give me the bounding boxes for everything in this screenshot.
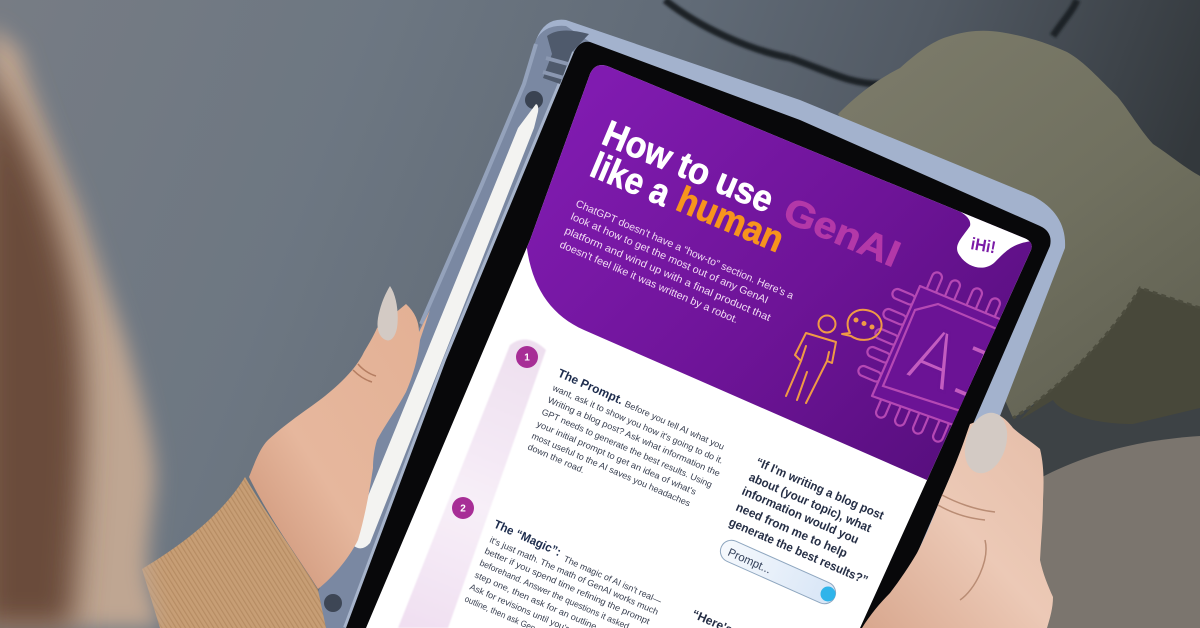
right fingernail xyxy=(958,408,1014,478)
title: GenAI xyxy=(778,190,906,275)
title: human xyxy=(671,179,790,260)
olive under-cuff shadow xyxy=(1020,288,1200,424)
left fingernail xyxy=(377,286,398,340)
infographic page xyxy=(366,65,1032,628)
sweater sleeve xyxy=(142,477,326,628)
illustration: AI chip xyxy=(857,271,1012,443)
prompt input pill: Prompt... xyxy=(726,547,773,576)
step 1 badge xyxy=(516,346,538,368)
grey knit fabric xyxy=(1040,436,1200,628)
right finger creases xyxy=(938,495,995,600)
prompt quote 1 xyxy=(727,455,886,587)
title xyxy=(590,120,902,267)
chip body xyxy=(872,286,1012,428)
step 1 text: The Prompt: want, ask it to show you how it's going to do it. xyxy=(550,382,725,466)
step 2 text: The Magic: The “Magic”: xyxy=(492,517,563,559)
chip letter I: I xyxy=(937,330,1014,429)
step 1 text: The Prompt: down the road. xyxy=(526,442,586,475)
title: like a xyxy=(585,145,677,214)
timeline strip xyxy=(398,340,546,628)
left pencil channel xyxy=(318,26,590,628)
left hand xyxy=(249,304,430,589)
slot groove ribs xyxy=(543,58,568,78)
step 2 text: The Magic: step one, then ask for an outline xyxy=(473,570,598,628)
step 1 text: The Prompt: Writing a blog post? Ask what information the xyxy=(546,395,722,478)
chip pins xyxy=(857,271,1002,443)
step 2 badge: 2 xyxy=(460,504,466,514)
step 1 text: The Prompt: your initial prompt to get an idea of what's xyxy=(535,419,698,497)
darker hair core xyxy=(0,60,83,628)
step 2 text: The Magic: it's just math. The math of GenAI works much xyxy=(488,535,660,617)
tablet black bezel xyxy=(346,42,1051,628)
pencil hole xyxy=(525,91,543,109)
lower case hole xyxy=(324,594,342,612)
chip inner frame xyxy=(883,304,1004,412)
trouser seam stitching xyxy=(1013,288,1200,418)
intro paragraph: platform and wind up with a final product that xyxy=(563,226,772,324)
step 2 text: The Magic: better if you spend time refining the prompt xyxy=(483,546,652,626)
apple pencil xyxy=(352,104,538,548)
step 2 text: The Magic: The magic of AI isn't real— xyxy=(562,554,663,606)
step 1 text: The Prompt: GPT needs to generate the best results. Using xyxy=(540,407,714,490)
olive trouser knee xyxy=(838,31,1200,418)
intro paragraph: ChatGPT doesn't have a “how-to” section. Here's a xyxy=(574,199,795,302)
illustration: speech bubble xyxy=(842,310,882,340)
illustration: person xyxy=(786,316,836,403)
step 2 badge xyxy=(452,497,474,519)
purple header panel xyxy=(515,50,1045,484)
intro paragraph: doesn't feel like it was written by a robot. xyxy=(558,240,739,326)
step 1 badge: 1 xyxy=(524,352,530,364)
prompt quote 1: need from me to help xyxy=(734,500,849,560)
step 1 text: The Prompt: most useful to the AI saves you headaches xyxy=(530,431,692,509)
logo white wave xyxy=(957,212,1030,268)
right hand xyxy=(862,414,1053,628)
prompt quote 1: generate the best results?” xyxy=(727,515,870,587)
intro paragraph: look at how to get the most out of any GenAI xyxy=(569,212,770,306)
thumb knuckle crease xyxy=(353,364,376,382)
slot recess xyxy=(543,30,589,84)
case outer rim xyxy=(421,44,536,324)
logo mark: iHi! xyxy=(969,234,997,257)
chip letter A: A xyxy=(897,308,973,409)
step 1 text: The Prompt: Before you tell AI what you xyxy=(623,399,726,452)
white page background xyxy=(366,65,1032,628)
send button xyxy=(820,586,836,602)
prompt quote 1: information would you xyxy=(740,484,861,547)
step 2 text: The Magic xyxy=(463,517,663,628)
black cable xyxy=(665,0,1077,84)
step 1 text: The Prompt: The Prompt. xyxy=(556,366,625,407)
title: How to use xyxy=(597,113,780,221)
prompt quote 1: about (your topic), what xyxy=(747,470,874,535)
prompt input pill xyxy=(720,540,836,604)
prompt quote 1: “If I'm writing a blog post xyxy=(754,455,886,523)
dark floor under leg xyxy=(1000,300,1200,628)
tablet case xyxy=(318,20,1065,628)
step 1 text: The Prompt xyxy=(526,366,726,509)
case light inner rim xyxy=(346,52,574,628)
blurred foreground hair xyxy=(0,25,160,628)
